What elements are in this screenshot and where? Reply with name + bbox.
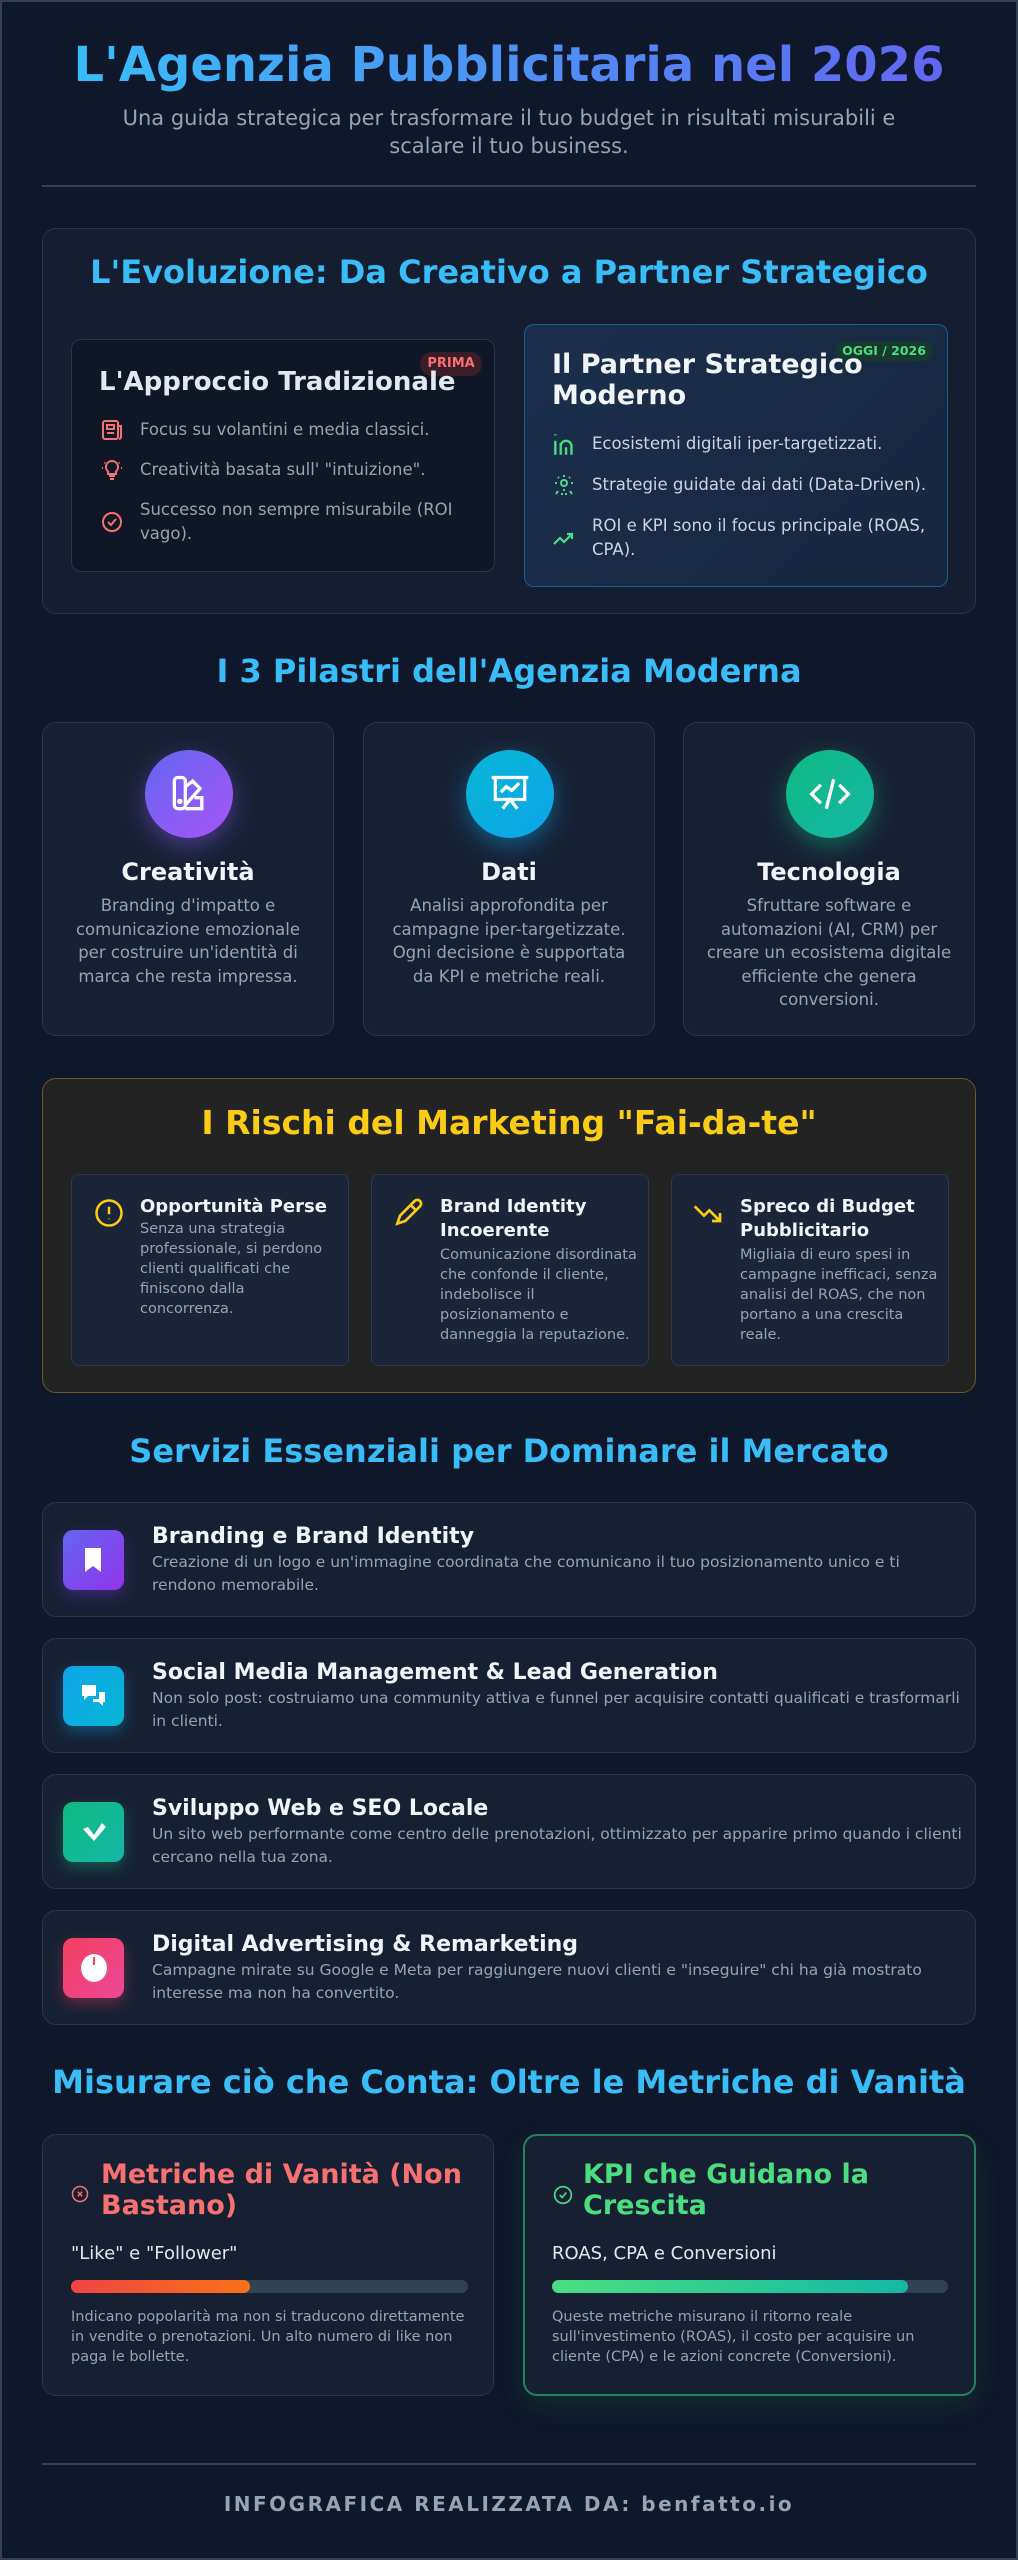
icon: handshake [63,1802,124,1862]
panel: pillar dati [363,722,655,1036]
heading: pillars: I 3 Pilastri dell'Agenzia Moderna [216,652,802,690]
panel: vanity metrics [42,2134,494,2396]
text: kpi desc: Queste metriche misurano il ritorno reale sull'investimento (ROAS), il costo per acquisire un cliente (CPA) e le azioni concrete (Conversioni). [552,2309,914,2365]
icon: alert [95,1199,123,1227]
label: roas cpa: ROAS, CPA e Conversioni [552,2243,777,2264]
text: web seo: Sviluppo Web e SEO Locale [152,1796,488,1821]
panel: pillar tecnologia [683,722,975,1036]
text: tecnologia: Sfruttare software e automazioni (AI, CRM) per creare un ecosistema digitale efficiente che genera conversioni. [707,896,951,1009]
heading: services: Servizi Essenziali per Dominare il Mercato [129,1432,889,1470]
text: web seo [152,1796,962,1866]
heading: kpi: KPI che Guidano la Crescita [583,2159,869,2221]
service: web seo [42,1774,976,1889]
icon: trend down [694,1205,722,1222]
label: like follower: "Like" e "Follower" [71,2243,237,2264]
heading: modern [552,349,863,411]
card: brand identity [371,1174,649,1366]
icon: chart [466,750,554,838]
bar: kpi [552,2280,948,2293]
text: branding: Creazione di un logo e un'immagine coordinata che comunicano il tuo posizionamento unico e ti rendono memorabile. [152,1553,900,1594]
list: modern: ROI e KPI sono il focus principale (ROAS, CPA). [592,516,925,559]
text: spreco budget [740,1196,937,1343]
panel: growth kpi [523,2134,976,2396]
text: branding: Branding e Brand Identity [152,1524,474,1549]
heading: metrics: Misurare ciò che Conta: Oltre le Metriche di Vanità [52,2063,966,2101]
text: opportunita: Senza una strategia professionale, si perdono clienti qualificati che finiscono dalla concorrenza. [140,1221,322,1317]
service: advertising [42,1910,976,2025]
card: modern [524,324,948,587]
badge: oggi 2026 [835,341,933,361]
bar: vanity [71,2280,468,2293]
service: branding [42,1502,976,1617]
heading: traditional: L'Approccio Tradizionale [99,367,455,397]
text: dati: Dati [481,858,537,886]
text: social: Social Media Management & Lead Generation [152,1660,718,1685]
text: spreco budget: Spreco di Budget Pubblicitario [740,1196,915,1241]
title: L'Agenzia Pubblicitaria nel 2026 [74,37,944,93]
card: spreco budget [671,1174,949,1366]
icon: bookmark [63,1530,124,1590]
text: advertising: Digital Advertising & Remarketing [152,1932,578,1957]
heading: vanity: Metriche di Vanità (Non Bastano) [101,2159,462,2221]
text: brand identity [440,1196,637,1343]
text: opportunita: Opportunità Perse [140,1196,327,1217]
icon: code [786,750,874,838]
icon: chat [63,1666,124,1726]
list: modern: Ecosistemi digitali iper-targetizzati. [592,434,882,453]
text: creativita: Branding d'impatto e comunicazione emozionale per costruire un'identità di marca che resta impressa. [76,896,300,986]
panel: pillar creativita [42,722,334,1036]
list: traditional: Focus su volantini e media classici. [140,420,430,439]
card: opportunita [71,1174,349,1366]
icon: mouse [63,1938,124,1998]
text: advertising [152,1932,922,2002]
heading: risks: I Rischi del Marketing "Fai-da-te" [201,1103,817,1142]
subtitle: Una guida strategica per trasformare il tuo budget in risultati misurabili e scalare il tuo business. [123,106,895,158]
footer: INFOGRAFICA REALIZZATA DA: benfatto.io [224,2492,794,2516]
list: traditional [102,420,453,543]
list: modern [553,434,926,559]
icon: pencil [395,1198,422,1226]
badge: prima: PRIMA [427,356,475,371]
text: vanity desc: Indicano popolarità ma non si traducono direttamente in vendite o prenotazioni. Un alto numero di like non paga le bollette. [71,2309,464,2365]
icon: check circle [554,2186,572,2204]
text: web seo: Un sito web performante come centro delle prenotazioni, ottimizzato per apparire primo quando i clienti cercano nella tua zona. [152,1825,962,1866]
heading: evolution: L'Evoluzione: Da Creativo a Partner Strategico [90,253,928,291]
text: social [152,1660,960,1730]
text: tecnologia: Tecnologia [757,858,901,886]
text: brand identity: Comunicazione disordinata che confonde il cliente, indebolisce il posizionamento e danneggia la reputazione. [440,1247,637,1343]
icon: x circle [72,2186,88,2202]
text: dati: Analisi approfondita per campagne iper-targetizzate. Ogni decisione è supportata da KPI e metriche reali. [392,896,626,986]
panel: risks [42,1078,976,1393]
text: social: Non solo post: costruiamo una community attiva e funnel per acquisire contatti qualificati e trasformarli in clienti. [152,1689,960,1730]
panel: evolution [42,228,976,614]
service: social [42,1638,976,1753]
text: branding [152,1524,900,1594]
text: advertising: Campagne mirate su Google e Meta per raggiungere nuovi clienti e "inseguire" chi ha già mostrato interesse ma non ha convertito. [152,1961,922,2002]
heading: modern: Il Partner Strategico [552,349,863,380]
icon: palette [145,750,233,838]
card: traditional [71,339,495,572]
heading: modern: Moderno [552,380,686,411]
list: modern: Strategie guidate dai dati (Data-Driven). [592,475,926,494]
text: creativita: Creatività [121,858,255,886]
list: traditional: Creatività basata sull' "intuizione". [140,460,425,479]
text: brand identity: Brand Identity Incoerente [440,1196,586,1241]
list: traditional: Successo non sempre misurabile (ROI vago). [140,500,453,543]
badge: prima [420,352,482,376]
text: spreco budget: Migliaia di euro spesi in campagne inefficaci, senza analisi del ROAS, che non portano a una crescita reale. [740,1247,937,1343]
badge: oggi 2026: OGGI / 2026 [842,343,926,358]
